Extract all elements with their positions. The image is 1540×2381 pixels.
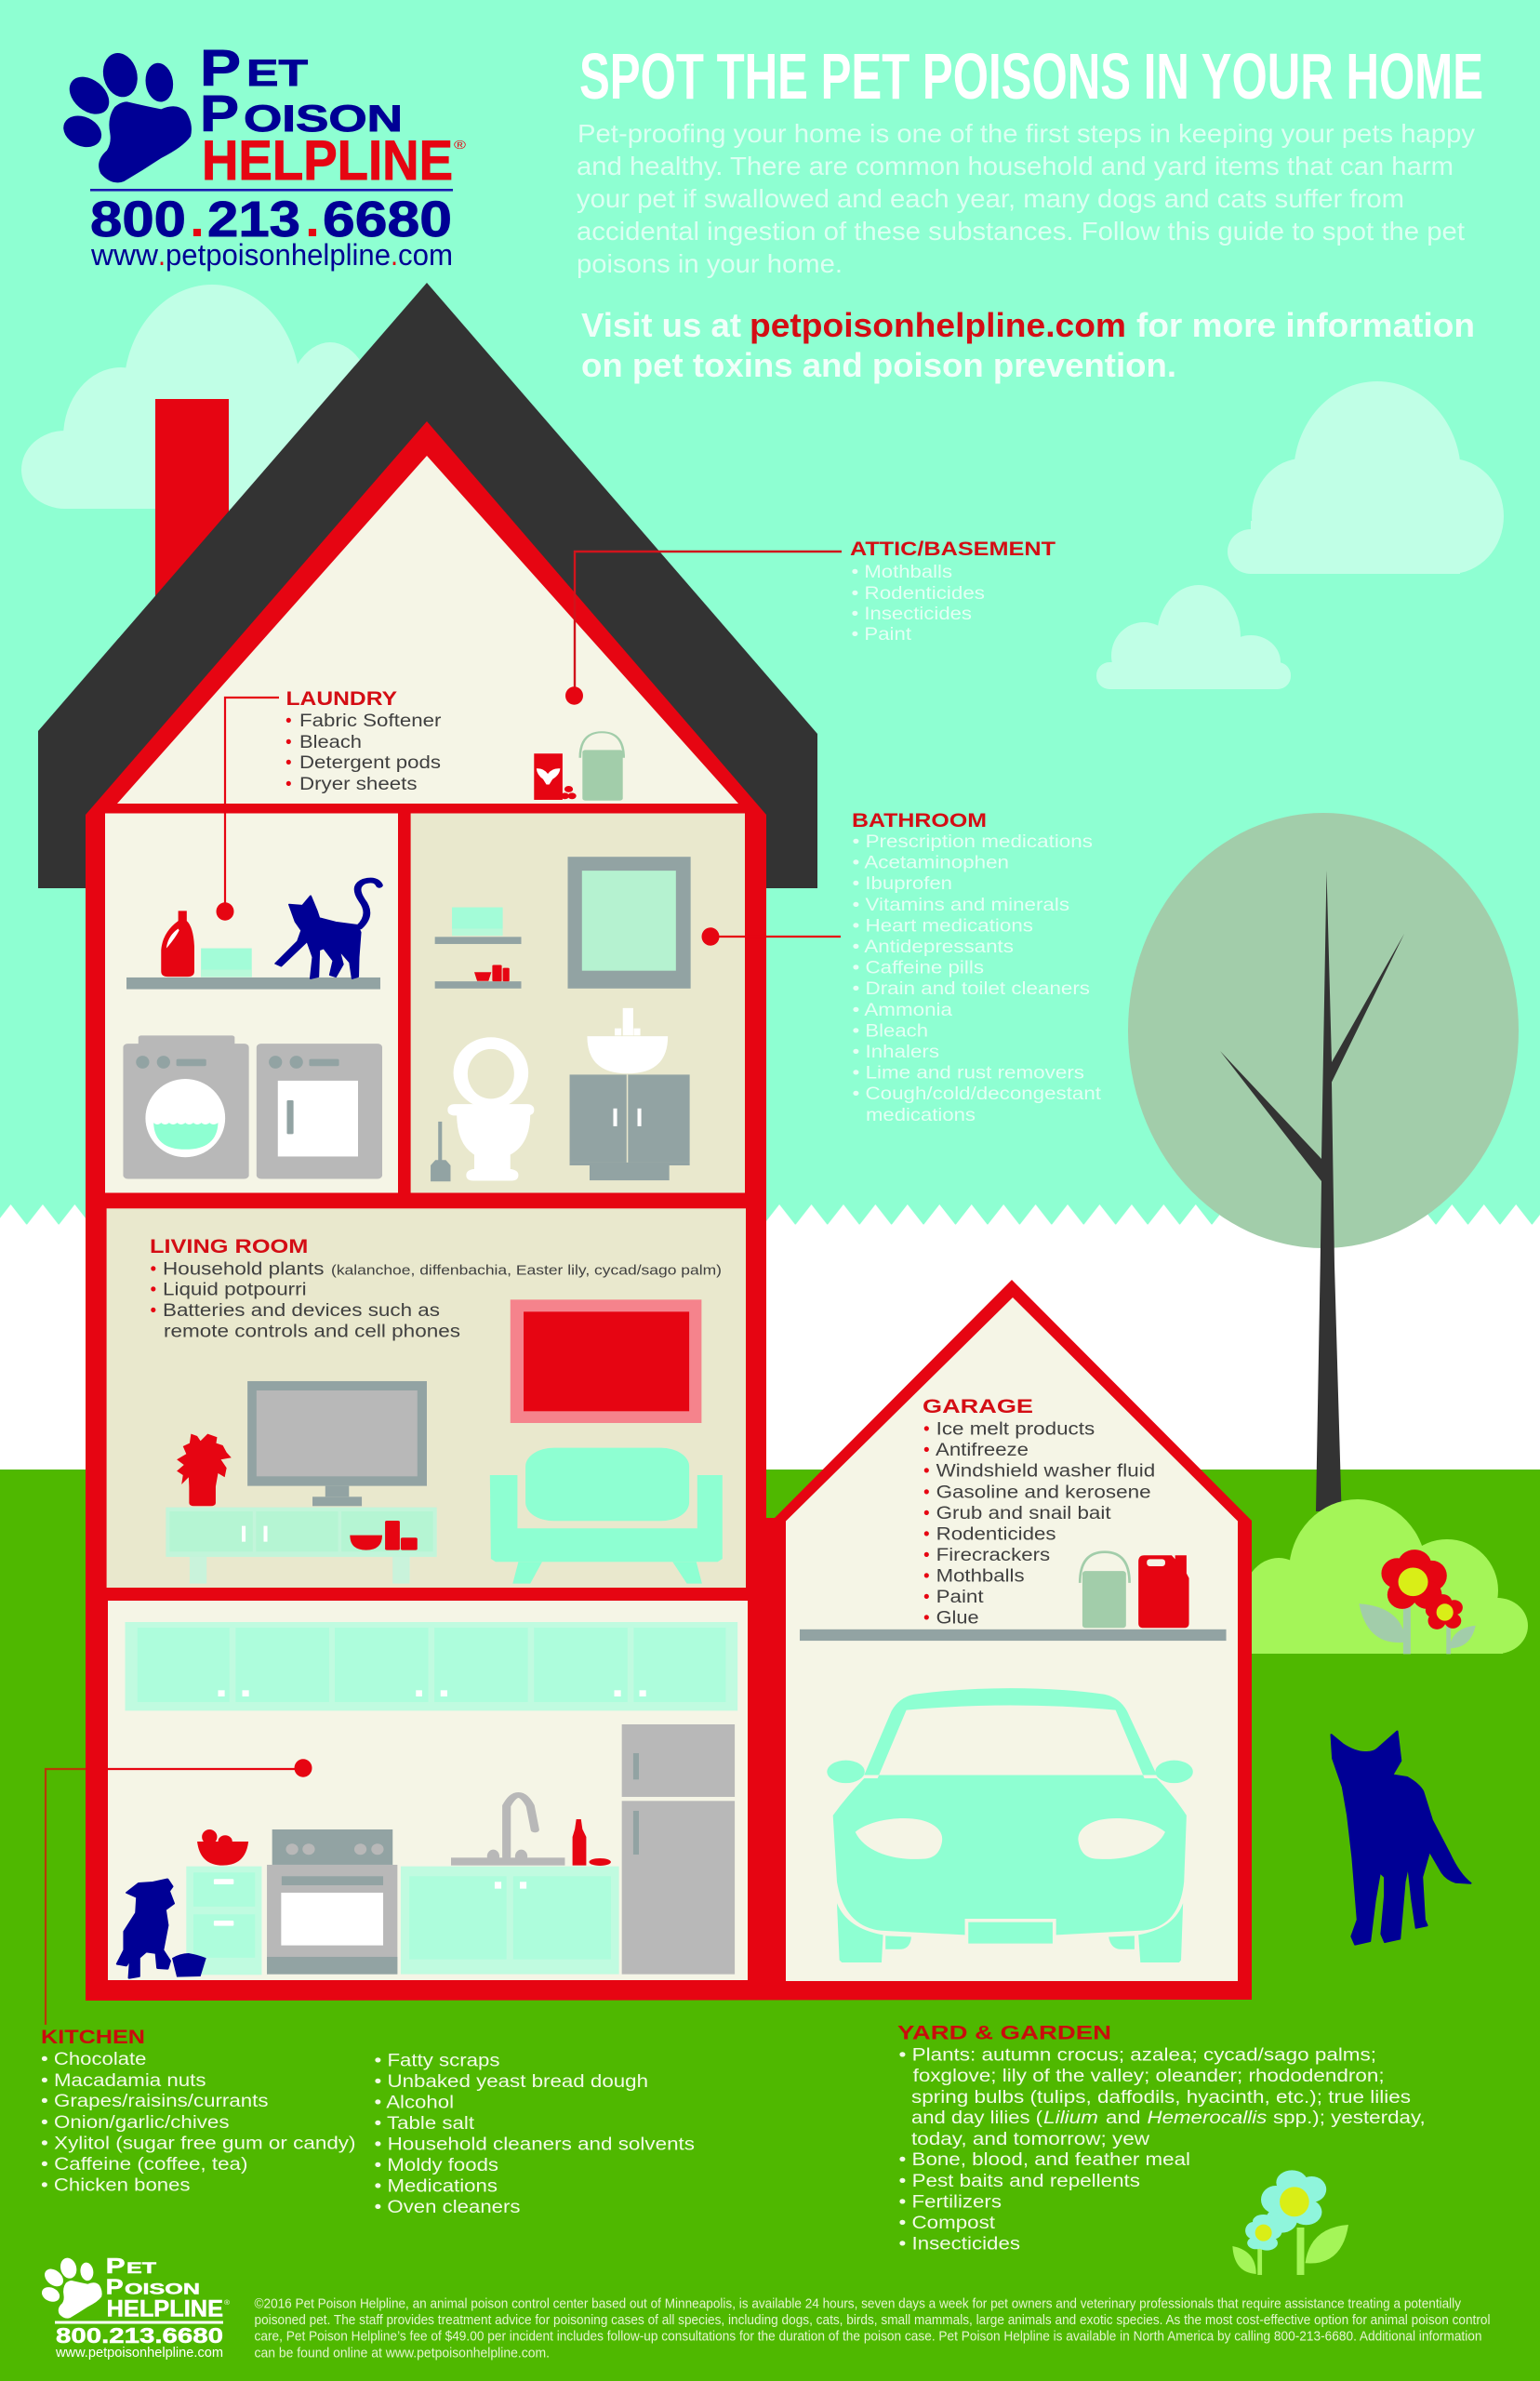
text: yard and garden list: spring bulbs (tulips, daffodils, hyacinth, etc.); true lilies xyxy=(911,2088,1411,2108)
bathroom fixtures xyxy=(431,857,691,1181)
text: laundry list: Bleach xyxy=(299,733,362,752)
text: yard and garden list: and xyxy=(1106,2108,1140,2128)
intro paragraph: your pet if swallowed and each year, many dogs and cats suffer from xyxy=(577,184,1404,213)
text: yard and garden list: • Insecticides xyxy=(898,2235,1020,2255)
chimney xyxy=(155,399,229,678)
text: yard and garden list: today, and tomorrow; yew xyxy=(911,2130,1149,2149)
main logo: OISON xyxy=(244,99,403,140)
text: bathroom list: medications xyxy=(866,1106,976,1125)
footer logo: www.petpoisonhelpline.com xyxy=(55,2346,223,2361)
text: garage list: Rodenticides xyxy=(936,1524,1056,1544)
text: living room list: remote controls and cell phones xyxy=(164,1323,460,1342)
text: attic/basement list: • Mothballs xyxy=(852,563,952,582)
footer disclaimer: ©2016 Pet Poison Helpline, an animal poison control center based out of Minneapolis, is available 24 hours, seven days a week for pet owners and veterinary professionals that require assistance treating a potentially xyxy=(255,2297,1462,2312)
text: kitchen list: • Caffeine (coffee, tea) xyxy=(41,2155,247,2175)
text: yard and garden list: • Pest baits and repellents xyxy=(898,2172,1140,2191)
text: garage list: • xyxy=(923,1524,930,1544)
text: bathroom list: • Vitamins and minerals xyxy=(852,896,1069,915)
main logo: P xyxy=(200,85,239,142)
footer logo: P xyxy=(106,2254,126,2278)
room: garage xyxy=(786,1297,1238,1981)
text: living room list: (kalanchoe, diffenbachia, Easter lily, cycad/sago palm) xyxy=(331,1262,722,1278)
room: living room xyxy=(107,1208,746,1588)
text: bathroom list: • Antidepressants xyxy=(852,938,1014,957)
text: yard and garden list: Lilium xyxy=(1043,2108,1098,2128)
icon: mint garden flowers xyxy=(1232,2170,1348,2275)
main logo: 213 xyxy=(207,192,300,247)
text: kitchen list: • Macadamia nuts xyxy=(41,2071,206,2091)
main logo: 800 xyxy=(90,192,186,247)
text: bathroom list: • Bleach xyxy=(852,1021,928,1041)
main logo: 6680 xyxy=(323,192,452,247)
visit us call to action: petpoisonhelpline.com xyxy=(750,306,1126,344)
text: bathroom list: • Inhalers xyxy=(852,1043,939,1062)
text: bathroom list: • Drain and toilet cleaners xyxy=(852,979,1090,999)
footer logo: ® xyxy=(224,2299,231,2307)
callout line: laundry xyxy=(216,698,279,921)
text: attic/basement list: • Insecticides xyxy=(852,605,972,624)
text: laundry list: Detergent pods xyxy=(299,753,441,773)
intro paragraph: accidental ingestion of these substances. Follow this guide to spot the pet xyxy=(577,217,1465,246)
text: bathroom list: • Acetaminophen xyxy=(852,854,1009,873)
footer logo: 800.213.6680 xyxy=(56,2323,223,2348)
visit us call to action: Visit us at xyxy=(581,306,741,344)
room: kitchen xyxy=(108,1601,748,1980)
text: yard and garden list: foxglove; lily of the valley; oleander; rhododendron; xyxy=(913,2067,1385,2086)
main logo: petpoisonhelpline xyxy=(166,238,391,272)
text: living room list: • xyxy=(151,1259,156,1279)
callout line: attic xyxy=(565,552,842,705)
text: bathroom list: • Ibuprofen xyxy=(852,874,952,894)
text: garage list: • xyxy=(923,1441,930,1460)
roof xyxy=(38,283,817,888)
text: living room list: Household plants xyxy=(163,1259,324,1279)
main logo: www xyxy=(90,238,159,272)
intro paragraph: and healthy. There are common household and yard items that can harm xyxy=(577,152,1454,180)
text: attic/basement list xyxy=(850,539,1055,645)
text: garage list: Ice melt products xyxy=(936,1420,1095,1440)
text: yard and garden list: • Plants: autumn crocus; azalea; cycad/sago palms; xyxy=(898,2046,1376,2066)
visit us call to action: on pet toxins and poison prevention. xyxy=(581,346,1176,384)
text: garage list xyxy=(923,1396,1155,1629)
text: garage list: • xyxy=(923,1566,930,1587)
room: attic xyxy=(117,456,738,804)
main logo: ET xyxy=(246,53,308,94)
text: garage list: Antifreeze xyxy=(936,1441,1029,1460)
text: yard and garden list: • Compost xyxy=(898,2214,996,2233)
text: bathroom list: • Cough/cold/decongestant xyxy=(852,1084,1102,1104)
text: kitchen list: • Table salt xyxy=(374,2114,475,2134)
text: kitchen list: • Grapes/raisins/currants xyxy=(41,2092,268,2111)
intro paragraph xyxy=(577,119,1475,278)
text: bathroom list: • Lime and rust removers xyxy=(852,1064,1084,1084)
text: garage list: • xyxy=(923,1504,930,1523)
footer logo: OISON xyxy=(125,2281,200,2298)
text: living room list xyxy=(150,1236,722,1342)
text: laundry list: • xyxy=(285,712,292,731)
text: kitchen list: • Household cleaners and solvents xyxy=(374,2135,695,2154)
text: kitchen list: • Xylitol (sugar free gum or candy) xyxy=(41,2135,355,2154)
main logo: . xyxy=(305,192,320,247)
text: garage list: • xyxy=(923,1483,930,1502)
text: laundry list: • xyxy=(285,775,292,794)
text: living room list: Liquid potpourri xyxy=(163,1281,307,1300)
main logo: HELPLINE xyxy=(202,129,453,192)
text: kitchen list: • Chicken bones xyxy=(41,2176,190,2196)
text: yard and garden list: and day lilies ( xyxy=(911,2108,1043,2128)
text: garage list: Firecrackers xyxy=(936,1546,1050,1565)
text: kitchen list: • Unbaked yeast bread dough xyxy=(374,2072,648,2092)
text: garage list: Paint xyxy=(936,1588,984,1607)
main logo: com xyxy=(398,238,453,272)
text: attic/basement list: ATTIC/BASEMENT xyxy=(850,539,1055,560)
cloud: left behind roof xyxy=(21,285,377,509)
text: yard and garden list: • Fertilizers xyxy=(898,2193,1002,2213)
text: kitchen list: • Fatty scraps xyxy=(374,2051,500,2070)
text: kitchen list: • Onion/garlic/chives xyxy=(41,2113,229,2133)
text: kitchen list: • Chocolate xyxy=(41,2050,147,2069)
footer disclaimer: poisoned pet. The staff provides treatment advice for poisoning cases of all species, including dogs, cats, birds, small mammals, large animals and exotic species. As the most cost-effective option for animal poison control xyxy=(255,2313,1490,2328)
text: living room list: LIVING ROOM xyxy=(150,1236,308,1257)
main logo: ® xyxy=(454,138,467,152)
text: bathroom list: BATHROOM xyxy=(852,810,987,831)
main logo: . xyxy=(190,192,205,247)
text: kitchen list: • Oven cleaners xyxy=(374,2198,521,2217)
text: garage list: Windshield washer fluid xyxy=(936,1462,1155,1482)
tree xyxy=(1128,813,1519,1511)
text: yard and garden list xyxy=(897,2023,1426,2255)
room: laundry xyxy=(105,813,398,1192)
text: kitchen list: • Medications xyxy=(374,2177,498,2197)
text: garage list: Glue xyxy=(936,1609,979,1629)
text: laundry list: Dryer sheets xyxy=(299,775,417,794)
text: garage list: Grub and snail bait xyxy=(936,1504,1111,1523)
icon: paw xyxy=(59,49,192,182)
main logo xyxy=(59,39,467,272)
text: bathroom list: • Caffeine pills xyxy=(852,959,984,978)
text: garage list: • xyxy=(923,1462,930,1482)
text: yard and garden list: Hemerocallis xyxy=(1148,2108,1268,2128)
main logo: . xyxy=(391,238,398,272)
text: bathroom list xyxy=(852,810,1102,1125)
text: laundry list xyxy=(285,688,442,794)
garage shelf, cans and car xyxy=(800,1552,1227,1962)
visit us call to action xyxy=(581,306,1475,384)
text: garage list: GARAGE xyxy=(923,1396,1033,1417)
text: garage list: • xyxy=(923,1609,930,1629)
main logo: P xyxy=(200,39,241,97)
text: garage list: Mothballs xyxy=(936,1566,1025,1587)
text: kitchen list: • Alcohol xyxy=(374,2093,454,2113)
footer disclaimer: can be found online at www.petpoisonhelpline.com. xyxy=(255,2346,550,2361)
cloud: large right xyxy=(1228,381,1504,574)
text: yard and garden list: YARD & GARDEN xyxy=(897,2023,1111,2044)
visit us call to action: for more information xyxy=(1136,306,1475,344)
text: yard and garden list: • Bone, blood, and feather meal xyxy=(898,2150,1190,2170)
room: bathroom xyxy=(411,813,745,1192)
kitchen fixtures xyxy=(117,1622,737,1978)
text: bathroom list: • Heart medications xyxy=(852,916,1033,936)
text: laundry list: • xyxy=(285,753,292,773)
text: bathroom list: • Prescription medications xyxy=(852,832,1093,852)
text: yard and garden list: spp.); yesterday, xyxy=(1273,2108,1426,2128)
icon: moth box and paint can xyxy=(534,732,624,801)
callout line: kitchen xyxy=(46,1759,312,2025)
text: living room list: • xyxy=(151,1281,156,1300)
white fence band xyxy=(0,1204,1540,1470)
text: laundry list: Fabric Softener xyxy=(299,712,442,731)
footer disclaimer xyxy=(255,2297,1490,2361)
intro paragraph: poisons in your home. xyxy=(577,249,843,278)
footer disclaimer: care, Pet Poison Helpline’s fee of $49.00 per incident includes follow-up consultations for the duration of the poison case. Pet Poison Helpline is available in North America by calling 800-213-6680. Additional information xyxy=(255,2330,1482,2345)
text: laundry list: LAUNDRY xyxy=(286,688,397,710)
footer logo: P xyxy=(106,2275,124,2299)
bush with red flowers xyxy=(1241,1499,1528,1654)
intro paragraph: Pet-proofing your home is one of the first steps in keeping your pets happy xyxy=(578,119,1475,148)
text: garage list: • xyxy=(923,1420,930,1440)
green lawn xyxy=(0,1470,1540,2381)
living room furniture xyxy=(166,1299,723,1584)
cloud: small right xyxy=(1096,585,1291,689)
text: kitchen list: • Moldy foods xyxy=(374,2156,498,2175)
text: bathroom list: • Ammonia xyxy=(852,1001,952,1020)
text: garage list: • xyxy=(923,1588,930,1607)
house walls and garage outline xyxy=(86,421,1252,2001)
text: laundry list: • xyxy=(285,733,292,752)
main logo: . xyxy=(158,238,166,272)
text: living room list: • xyxy=(151,1301,156,1321)
text: kitchen list xyxy=(41,2027,695,2217)
footer logo xyxy=(39,2254,231,2361)
text: garage list: • xyxy=(923,1546,930,1565)
icon: white paw xyxy=(39,2256,102,2319)
footer logo: ET xyxy=(126,2259,157,2277)
text: kitchen list: KITCHEN xyxy=(41,2027,145,2048)
laundry shelf, bottle, box and cat xyxy=(123,881,382,1179)
footer logo: HELPLINE xyxy=(107,2296,223,2322)
text: living room list: Batteries and devices such as xyxy=(163,1301,440,1321)
callout line: bathroom xyxy=(701,927,841,946)
text: attic/basement list: • Paint xyxy=(852,625,912,645)
text: garage list: Gasoline and kerosene xyxy=(936,1483,1151,1502)
icon: outdoor blue cat xyxy=(1332,1732,1470,1945)
text: attic/basement list: • Rodenticides xyxy=(852,584,985,604)
